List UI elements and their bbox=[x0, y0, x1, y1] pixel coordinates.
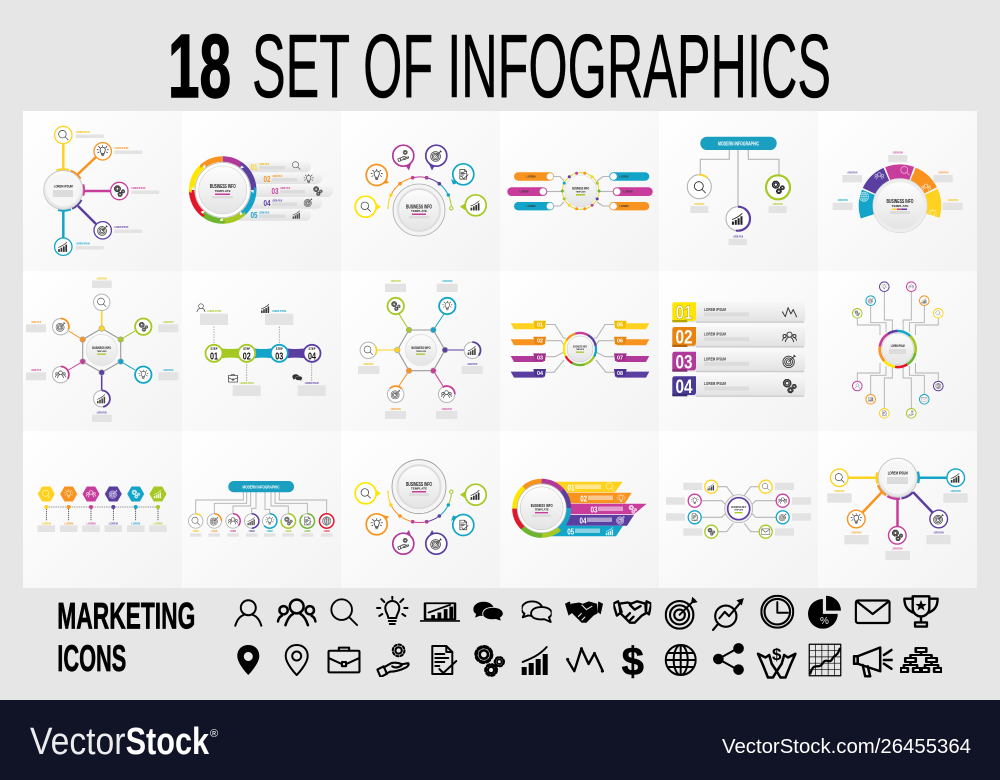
ring bbox=[558, 327, 602, 371]
VectorStock logo: Stock bbox=[126, 721, 210, 763]
labels: LOREM bbox=[109, 521, 118, 525]
ribbon numbers: 03 bbox=[537, 355, 543, 361]
icon row 2 bbox=[237, 643, 941, 678]
labels bbox=[358, 279, 483, 419]
nodes bbox=[830, 469, 964, 544]
labels: LOREM IPSUM bbox=[948, 198, 958, 202]
panel 6: semicircle segments bbox=[833, 150, 963, 251]
hexagon bbox=[83, 328, 121, 372]
bands bbox=[541, 482, 647, 536]
hub: TEMPLATE bbox=[892, 204, 908, 208]
step text bbox=[210, 347, 316, 362]
band numbers: 03 bbox=[590, 504, 598, 514]
numbers: 03 bbox=[272, 187, 279, 196]
nodes bbox=[55, 126, 128, 255]
hexagon bbox=[397, 330, 445, 371]
band icons bbox=[606, 483, 637, 535]
bubbles bbox=[355, 483, 486, 554]
labels: LOREM IPSUM bbox=[76, 130, 90, 134]
hub bbox=[517, 484, 566, 533]
step text: 04 bbox=[308, 352, 316, 362]
bubbles bbox=[355, 145, 486, 217]
labels: LOREM bbox=[304, 529, 311, 533]
labels: LOREM bbox=[86, 521, 96, 525]
node icons bbox=[58, 130, 125, 252]
card text: LOREM IPSUM bbox=[704, 356, 726, 361]
hub: TEMPLATE bbox=[411, 209, 427, 213]
numbers: 04 bbox=[676, 377, 693, 398]
numbers: 02 bbox=[264, 175, 271, 184]
labels: LOREM IPSUM bbox=[892, 547, 903, 551]
labels: LOREM IPSUM bbox=[834, 489, 845, 493]
step text: 02 bbox=[243, 352, 251, 362]
labels: LOREM IPSUM bbox=[163, 368, 174, 372]
labels: LOREM bbox=[131, 521, 141, 525]
labels: LOREM IPSUM bbox=[391, 407, 401, 411]
hands dollar sign: $ bbox=[772, 645, 782, 664]
header pill bbox=[228, 481, 294, 492]
labels: LOREM bbox=[324, 529, 330, 533]
labels: LOREM IPSUM bbox=[31, 320, 41, 324]
title: 18 bbox=[168, 17, 231, 117]
hexagon icons bbox=[43, 490, 161, 498]
labels: LOREM IPSUM bbox=[938, 170, 949, 174]
hub: TEMPLATE bbox=[576, 348, 584, 351]
labels: LOREM IPSUM bbox=[442, 279, 453, 283]
labels: LOREM IPSUM bbox=[76, 242, 90, 246]
segment icons bbox=[859, 166, 938, 218]
footer bar bbox=[0, 700, 1000, 780]
node icons bbox=[691, 483, 787, 535]
labels: LOREM IPSUM bbox=[847, 170, 858, 174]
labels bbox=[827, 489, 968, 560]
numbers bbox=[676, 303, 693, 398]
nodes bbox=[687, 175, 790, 231]
hub: BUSINESS INFO bbox=[406, 482, 432, 488]
hub: LOREM IPSUM bbox=[54, 184, 73, 188]
panel 17: small hub with eight nodes bbox=[666, 480, 811, 538]
labels: LOREM IPSUM bbox=[207, 309, 222, 313]
dollar icon: $ bbox=[622, 640, 644, 684]
labels: LOREM IPSUM bbox=[773, 202, 783, 206]
dotted arc bbox=[387, 176, 453, 210]
labels: LOREM IPSUM bbox=[114, 225, 129, 229]
pills bbox=[507, 172, 653, 210]
hub: BUSINESS INFO bbox=[210, 184, 236, 190]
lines bbox=[196, 492, 327, 514]
numbers: 02 bbox=[676, 328, 692, 349]
hub bbox=[195, 162, 250, 218]
hub: BUSINESS INFO bbox=[531, 503, 553, 509]
hub: TEMPLATE bbox=[734, 508, 744, 512]
connector lines bbox=[700, 150, 779, 207]
labels bbox=[26, 276, 178, 422]
step text: 01 bbox=[210, 352, 218, 362]
ribbon numbers: 06 bbox=[617, 339, 623, 345]
step text: STEP bbox=[276, 347, 283, 351]
nodes bbox=[52, 294, 152, 407]
numbers bbox=[250, 163, 279, 220]
connectors bbox=[35, 144, 110, 238]
hub: LOREM IPSUM bbox=[891, 344, 905, 348]
hub: TEMPLATE bbox=[535, 508, 549, 512]
step text: 03 bbox=[275, 352, 284, 362]
hub bbox=[392, 460, 446, 514]
step text: STEP bbox=[243, 347, 251, 351]
numbers: 05 bbox=[250, 211, 258, 220]
card shadows bbox=[696, 322, 804, 397]
ribbon numbers: 08 bbox=[617, 371, 623, 377]
panel 15: hub with speech bubbles below bbox=[355, 460, 486, 554]
band text bbox=[575, 484, 623, 533]
marketing icons heading: MARKETING bbox=[57, 595, 195, 636]
hub bbox=[878, 458, 917, 497]
panel 4: hub with six pills bbox=[507, 172, 653, 210]
icons bbox=[55, 298, 148, 403]
labels: LOREM IPSUM bbox=[97, 410, 107, 414]
pill labels: LOREM bbox=[520, 190, 529, 194]
ribbon numbers: 01 bbox=[537, 323, 543, 329]
labels: LOREM IPSUM bbox=[305, 381, 319, 385]
VectorStock logo bbox=[30, 721, 218, 763]
panel 8: four step chain bbox=[197, 304, 326, 396]
hub bbox=[562, 173, 599, 209]
image id: VectorStock.com/26455364 bbox=[722, 736, 971, 758]
step circles bbox=[206, 345, 320, 362]
labels: LOREM bbox=[42, 521, 51, 525]
labels: LOREM IPSUM bbox=[272, 309, 287, 313]
labels: LOREM IPSUM bbox=[951, 489, 961, 493]
ribbon numbers: 07 bbox=[617, 355, 623, 361]
hub: BUSINESS INFO bbox=[412, 346, 431, 350]
labels: LOREM bbox=[267, 529, 273, 533]
tab text: LOREM IPSUM bbox=[259, 210, 269, 214]
ribbon numbers: 02 bbox=[537, 339, 543, 345]
band numbers: 01 bbox=[568, 482, 575, 492]
pill labels: LOREM bbox=[620, 204, 629, 208]
labels: LOREM IPSUM bbox=[467, 362, 478, 366]
labels: LOREM bbox=[64, 521, 74, 525]
panel 7: hexagon with six nodes bbox=[26, 276, 178, 422]
header pill: MODERN INFOGRAPHIC bbox=[242, 484, 280, 490]
labels bbox=[190, 529, 332, 537]
ring bbox=[504, 470, 580, 546]
tabs bbox=[235, 162, 333, 221]
panel 13: hexagon timeline bbox=[38, 486, 167, 532]
panel 18: hub with five large nodes bbox=[827, 448, 968, 560]
labels: LOREM IPSUM bbox=[838, 198, 848, 202]
hub: BUSINESS INFO bbox=[572, 186, 590, 190]
VectorStock logo: ® bbox=[210, 728, 218, 740]
labels: LOREM IPSUM bbox=[934, 531, 944, 535]
connectors bbox=[701, 487, 776, 532]
band numbers bbox=[567, 482, 598, 536]
band numbers: 02 bbox=[580, 494, 587, 504]
dashed leaders bbox=[214, 326, 312, 381]
nodes bbox=[357, 298, 480, 406]
ring bbox=[872, 324, 923, 374]
hub bbox=[873, 179, 927, 233]
band numbers: 04 bbox=[580, 516, 587, 526]
cards bbox=[672, 302, 805, 396]
node icons bbox=[192, 516, 331, 525]
hexagons bbox=[38, 486, 166, 502]
numbers: 01 bbox=[676, 303, 693, 324]
nodes bbox=[188, 514, 334, 528]
hub: BUSINESS INFO bbox=[406, 204, 432, 210]
labels: LOREM IPSUM bbox=[240, 381, 254, 385]
ribbons left bbox=[511, 321, 546, 378]
numbers: 03 bbox=[676, 352, 692, 373]
vertices bbox=[394, 327, 448, 374]
nodes bbox=[852, 282, 943, 418]
pill labels: LOREM bbox=[624, 190, 633, 194]
nodes bbox=[688, 480, 789, 538]
hub: BUSINESS INFO bbox=[731, 505, 747, 509]
pill labels: LOREM bbox=[526, 204, 536, 208]
panel 11: four numbered cards bbox=[672, 302, 805, 398]
node arcs bbox=[188, 514, 334, 528]
marketing icons heading: ICONS bbox=[57, 638, 126, 679]
tab text: LOREM IPSUM bbox=[259, 162, 269, 166]
icon row 1 bbox=[235, 596, 938, 630]
tab text: LOREM IPSUM bbox=[272, 174, 282, 178]
connectors bbox=[546, 324, 614, 372]
icons bbox=[364, 301, 476, 399]
step text: STEP bbox=[308, 347, 316, 351]
hub: BUSINESS INFO bbox=[886, 199, 914, 205]
hub: TEMPLATE bbox=[416, 350, 426, 353]
panel 10: ribbons around a ring bbox=[511, 321, 649, 378]
vertices bbox=[80, 326, 123, 375]
band numbers: 05 bbox=[567, 526, 574, 536]
card text: LOREM IPSUM bbox=[704, 381, 726, 386]
pill icons bbox=[540, 173, 620, 210]
step text: STEP bbox=[210, 347, 218, 351]
ribbon numbers bbox=[537, 323, 623, 377]
numbers: 04 bbox=[264, 199, 271, 208]
bands bbox=[214, 347, 312, 360]
numbers: 01 bbox=[250, 163, 258, 172]
hub: TEMPLATE bbox=[215, 189, 231, 193]
labels: LOREM IPSUM bbox=[442, 407, 452, 411]
labels: LOREM IPSUM bbox=[163, 320, 174, 324]
panel 12: circuit diagram bbox=[852, 282, 943, 418]
circuit lines bbox=[857, 292, 938, 408]
labels: LOREM IPSUM bbox=[893, 150, 903, 154]
ring dots bbox=[561, 172, 600, 210]
tab text: LOREM IPSUM bbox=[272, 198, 282, 202]
labels: LOREM IPSUM bbox=[694, 202, 705, 206]
ribbons right bbox=[614, 321, 649, 378]
segments bbox=[855, 160, 945, 251]
marketing icons heading bbox=[57, 595, 195, 679]
labels: LOREM IPSUM bbox=[363, 362, 374, 366]
hub bbox=[725, 495, 753, 523]
labels: LOREM bbox=[249, 529, 255, 533]
hub bbox=[393, 184, 445, 236]
labels: LOREM bbox=[230, 529, 236, 533]
hub: BUSINESS INFO bbox=[573, 344, 588, 348]
hub bbox=[567, 336, 593, 362]
panel 3: hub with speech bubbles above bbox=[355, 145, 486, 236]
labels: LOREM bbox=[285, 529, 292, 533]
labels: LOREM IPSUM bbox=[851, 531, 862, 535]
ribbon numbers: 04 bbox=[537, 371, 544, 377]
panel 14: modern infographic with eight nodes bbox=[188, 481, 334, 537]
node icons bbox=[855, 284, 941, 416]
panel 1: radial five-node diagram bbox=[35, 126, 159, 255]
timeline bbox=[44, 505, 160, 521]
card text: LOREM IPSUM bbox=[704, 332, 726, 337]
node icons bbox=[694, 181, 784, 225]
hub: TEMPLATE bbox=[411, 486, 427, 490]
labels: LOREM IPSUM bbox=[31, 368, 41, 372]
card icons bbox=[782, 307, 797, 393]
hub: LOREM IPSUM bbox=[888, 470, 908, 476]
pill labels bbox=[520, 174, 633, 208]
hub: BUSINESS INFO bbox=[92, 346, 112, 350]
hub: TEMPLATE bbox=[97, 350, 107, 353]
panel grid background bbox=[23, 111, 977, 588]
labels bbox=[690, 202, 787, 245]
labels bbox=[833, 150, 963, 210]
spokes bbox=[68, 311, 135, 390]
card text bbox=[704, 307, 749, 390]
labels: LOREM IPSUM bbox=[131, 186, 146, 190]
ring bbox=[179, 146, 266, 234]
tab text: LOREM IPSUM bbox=[280, 186, 290, 190]
header pill: MODERN INFOGRAPHIC bbox=[718, 142, 759, 148]
spokes bbox=[377, 314, 464, 386]
labels: LOREM bbox=[154, 521, 163, 525]
labels: LOREM IPSUM bbox=[391, 279, 401, 283]
labels bbox=[76, 130, 159, 250]
card text: LOREM IPSUM bbox=[704, 307, 726, 312]
dotted arc bbox=[387, 490, 453, 524]
labels: LOREM IPSUM bbox=[114, 146, 129, 150]
panel 5: modern infographic org diagram bbox=[687, 137, 790, 245]
labels bbox=[200, 309, 326, 396]
color blocks bbox=[672, 302, 696, 396]
labels: LOREM bbox=[193, 529, 199, 533]
title bbox=[168, 17, 831, 117]
connectors bbox=[547, 176, 613, 206]
tab icons bbox=[292, 162, 322, 219]
panel 2: ring with five tabs bbox=[179, 146, 333, 234]
panel 16: ring with slanted bands bbox=[504, 470, 647, 546]
labels: LOREM bbox=[211, 529, 218, 533]
ribbon numbers: 05 bbox=[617, 323, 623, 329]
labels: LOREM IPSUM bbox=[733, 234, 743, 238]
node icons bbox=[835, 473, 959, 541]
labels bbox=[38, 521, 167, 532]
labels: LOREM IPSUM bbox=[97, 276, 107, 280]
tab text bbox=[259, 162, 305, 218]
connectors bbox=[848, 448, 947, 526]
hub: TEMPLATE bbox=[576, 190, 586, 194]
pill labels: LOREM bbox=[526, 174, 536, 178]
pie percent sign: % bbox=[820, 616, 829, 627]
VectorStock logo: Vector bbox=[30, 721, 126, 763]
hub bbox=[86, 334, 117, 366]
pill labels: LOREM bbox=[620, 174, 629, 178]
panel 9: flat hexagon with six nodes bbox=[357, 279, 483, 419]
text blocks bbox=[666, 483, 811, 536]
hub bbox=[406, 334, 436, 366]
step icons bbox=[197, 304, 302, 382]
